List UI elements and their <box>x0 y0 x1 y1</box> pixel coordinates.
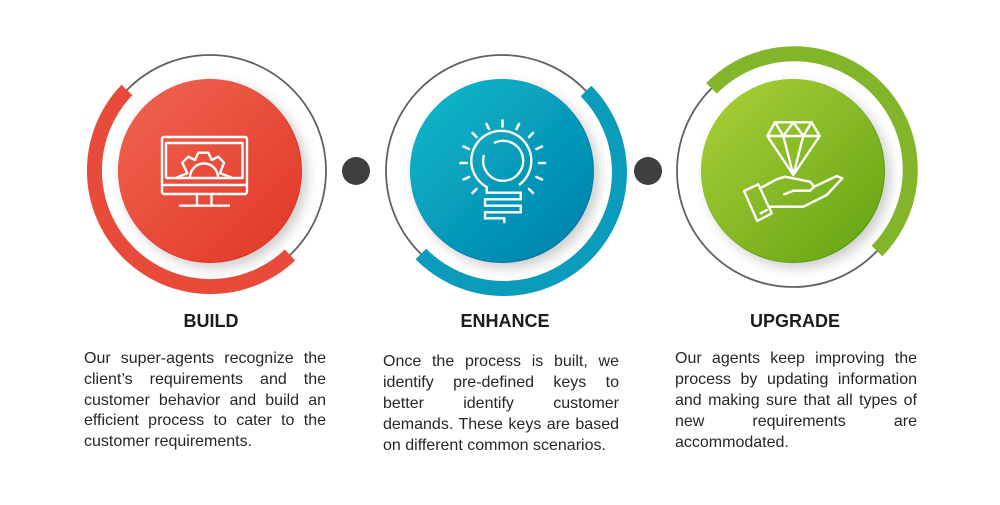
thin ring <box>94 55 326 287</box>
text: enhance description: identify pre-defined keys to <box>383 374 619 390</box>
panel: upgrade <box>675 46 918 450</box>
text: enhance description: on different common scenarios. <box>383 436 606 454</box>
thick arc <box>94 90 290 287</box>
text: enhance description: Once the process is built, we <box>383 352 619 370</box>
text: upgrade description: new requirements are <box>675 412 917 430</box>
heading: build: BUILD <box>184 311 238 331</box>
text: upgrade description: process by updating information <box>675 370 917 388</box>
thin ring <box>386 55 618 287</box>
text: upgrade description <box>675 350 917 450</box>
upgrade circle graphic <box>676 46 918 288</box>
disc <box>701 79 885 263</box>
enhance circle graphic <box>385 54 627 296</box>
text: build description <box>84 350 326 450</box>
connector dot 2 <box>634 157 662 185</box>
icon: light bulb <box>460 120 545 223</box>
thick arc <box>421 91 619 289</box>
text: build description: customer requirements. <box>84 433 252 450</box>
panel: build <box>84 54 327 450</box>
text: enhance description <box>383 352 619 454</box>
icon: diamond over hand <box>744 122 842 221</box>
text: build description: client’s requirements and the <box>84 371 326 388</box>
disc <box>410 79 594 263</box>
text: build description: Our super-agents recognize the <box>84 350 326 367</box>
text: upgrade description: accommodated. <box>675 434 789 450</box>
icon: monitor with gear <box>162 137 247 206</box>
text: enhance description: demands. These keys are based <box>383 416 619 432</box>
connector dot 1 <box>342 157 370 185</box>
text: upgrade description: Our agents keep improving the <box>675 350 917 366</box>
heading: upgrade: UPGRADE <box>750 311 840 331</box>
thin ring <box>677 55 909 287</box>
disc <box>118 79 302 263</box>
thick arc <box>712 54 910 251</box>
panel: enhance <box>383 54 627 454</box>
text: build description: customer behavior and build an <box>84 392 326 408</box>
text: enhance description: better identify customer <box>383 394 619 412</box>
text: upgrade description: and making sure that all types of <box>675 392 917 408</box>
heading: enhance: ENHANCE <box>460 311 550 331</box>
text: build description: efficient process to cater to the <box>84 412 326 429</box>
build circle graphic <box>86 54 327 294</box>
